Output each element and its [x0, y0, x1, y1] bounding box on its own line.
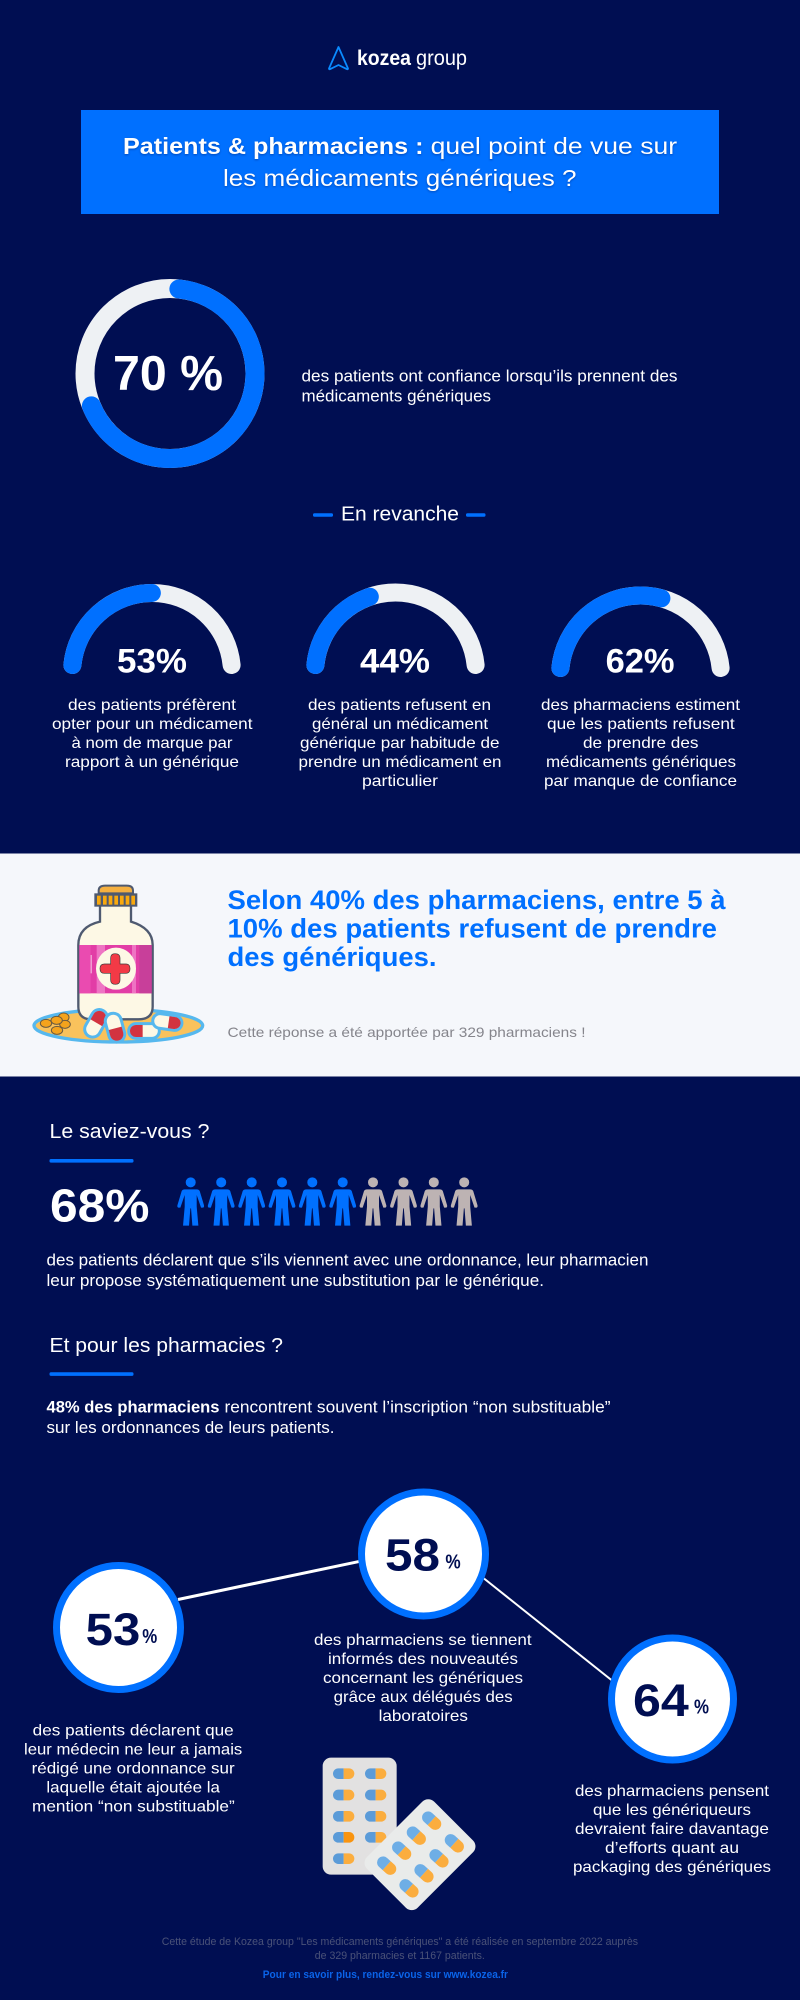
text: 64% description: packaging des génériques — [573, 1859, 771, 1876]
band subtext: Cette réponse a été apportée par 329 pharmaciens ! — [228, 1024, 586, 1040]
stat circle: 53% — [56, 1566, 180, 1690]
logo wordmark bold: kozea — [357, 47, 411, 70]
text: 53% description: mention “non substituable” — [32, 1798, 235, 1815]
footer: study note — [162, 1936, 638, 1962]
gauge: 62%: 62% — [606, 643, 675, 681]
icon: medicine bottle with pills — [34, 886, 203, 1044]
text: gauge 62% description: de prendre des — [583, 735, 698, 752]
icon: navigation arrow — [329, 47, 348, 69]
text: 58% description — [314, 1632, 532, 1725]
text: gauge 44% description: prendre un médicament en — [298, 754, 502, 771]
gauge: 62% — [560, 596, 721, 681]
stat circle: 64% — [612, 1638, 734, 1760]
title regular part: quel point de vue sur — [431, 133, 677, 159]
stat: 68%: 68% — [50, 1180, 150, 1232]
text: gauge 62% description: que les patients refusent — [547, 716, 735, 733]
text: 53% description: rédigé une ordonnance sur — [32, 1760, 235, 1777]
text: patients confidence — [302, 368, 678, 406]
text: 58% description: des pharmaciens se tiennent — [314, 1632, 532, 1649]
text: 68% description: des patients déclarent que s’ils viennent avec une ordonnance, leur pharmacien — [46, 1252, 648, 1270]
donut value: 70 % — [113, 347, 223, 401]
gauge: 53% — [72, 593, 232, 681]
text: 48% des pharmaciens: rencontrent souvent l’inscription “non substituable” — [224, 1399, 610, 1417]
text: gauge 44% description: particulier — [362, 773, 439, 790]
text: 53% description: des patients déclarent que — [33, 1722, 234, 1739]
text: 53% description — [24, 1722, 242, 1815]
text: patients confidence: des patients ont confiance lorsqu’ils prennent des — [302, 368, 678, 386]
text: 64% description: devraient faire davantage — [575, 1821, 769, 1838]
text: gauge 62% description: des pharmaciens estiment — [541, 697, 741, 714]
heading: En revanche — [313, 503, 486, 526]
stat circle: 64%: % — [694, 1696, 709, 1718]
text: 68% description — [46, 1252, 648, 1290]
text: gauge 44% description: des patients refusent en — [308, 697, 491, 714]
text: gauge 62% description: médicaments génériques — [546, 754, 736, 771]
text: gauge 53% description: à nom de marque par — [72, 735, 233, 752]
band heading: Selon 40% des pharmaciens, entre 5 à — [228, 885, 726, 915]
text: 64% description — [573, 1783, 771, 1876]
text: gauge 53% description — [52, 697, 253, 771]
title bold part: Patients & pharmaciens : — [123, 133, 424, 159]
heading: Le saviez-vous: Le saviez-vous ? — [50, 1120, 210, 1143]
text: gauge 53% description: rapport à un générique — [65, 754, 239, 771]
footer: link: Pour en savoir plus, rendez-vous sur www.kozea.fr — [263, 1969, 509, 1981]
text: 64% description: des pharmaciens pensent — [575, 1783, 770, 1800]
band heading: 10% des patients refusent de prendre — [228, 914, 717, 944]
text: gauge 62% description: par manque de confiance — [544, 773, 737, 790]
band heading: des génériques. — [228, 942, 436, 972]
text: 58% description: concernant les génériques — [323, 1670, 523, 1687]
gauge: 53%: 53% — [117, 643, 187, 681]
logo wordmark regular: group — [416, 47, 467, 70]
stat circle: 53%: % — [142, 1626, 157, 1648]
title second line: les médicaments génériques ? — [223, 165, 576, 191]
stat circle: 58% — [362, 1492, 486, 1616]
text: 64% description: d’efforts quant au — [605, 1840, 739, 1857]
heading: Et pour les pharmacies — [50, 1334, 283, 1376]
band heading — [228, 885, 726, 972]
footer: study note: Cette étude de Kozea group "Les médicaments génériques" a été réalisée en septembre 2022 auprès — [162, 1936, 638, 1948]
icon: blister packs of capsules — [323, 1758, 479, 1914]
title text — [123, 133, 677, 191]
donut chart: 70 % — [77, 280, 263, 467]
title banner — [81, 110, 719, 214]
text: 58% description: laboratoires — [379, 1708, 468, 1725]
text: 53% description: leur médecin ne leur a jamais — [24, 1741, 242, 1758]
text: patients confidence: médicaments génériques — [302, 388, 491, 406]
gauge: 44% — [315, 593, 476, 681]
heading: Le saviez-vous — [50, 1120, 210, 1163]
footer: study note: de 329 pharmacies et 1167 patients. — [315, 1950, 485, 1962]
text: gauge 44% description: général un médicament — [312, 716, 489, 733]
stat circle: 64%: 64 — [633, 1675, 689, 1726]
text: 48% des pharmaciens — [46, 1399, 610, 1437]
connector: 58% to 64% — [484, 1578, 612, 1680]
heading: En revanche: En revanche — [341, 503, 459, 526]
text: 58% description: informés des nouveautés — [328, 1651, 518, 1668]
text: 48% des pharmaciens: sur les ordonnances de leurs patients. — [46, 1419, 334, 1437]
pictogram: 10 people, 6 highlighted — [177, 1177, 478, 1226]
text: gauge 44% description: générique par habitude de — [300, 735, 500, 752]
text: gauge 44% description — [298, 697, 502, 790]
text: gauge 62% description — [541, 697, 741, 790]
stat circle: 58%: % — [445, 1552, 461, 1574]
text: 48% des pharmaciens: 48% des pharmaciens — [46, 1399, 220, 1417]
stat circle: 58%: 58 — [385, 1530, 440, 1581]
logo: kozea group — [329, 47, 467, 70]
text: 64% description: que les génériqueurs — [593, 1802, 751, 1819]
text: 58% description: grâce aux délégués des — [334, 1689, 513, 1706]
panel: pharmacists 40% band — [0, 854, 800, 1076]
connector: 53% to 58% — [178, 1561, 360, 1600]
gauge: 44%: 44% — [360, 643, 430, 681]
stat circle: 53%: 53 — [86, 1604, 140, 1655]
text: gauge 53% description: opter pour un médicament — [52, 716, 253, 733]
heading: Et pour les pharmacies: Et pour les pharmacies ? — [50, 1334, 283, 1357]
text: 68% description: leur propose systématiquement une substitution par le générique. — [46, 1272, 544, 1290]
text: 53% description: laquelle était ajoutée la — [46, 1779, 220, 1796]
text: gauge 53% description: des patients préfèrent — [68, 697, 237, 714]
